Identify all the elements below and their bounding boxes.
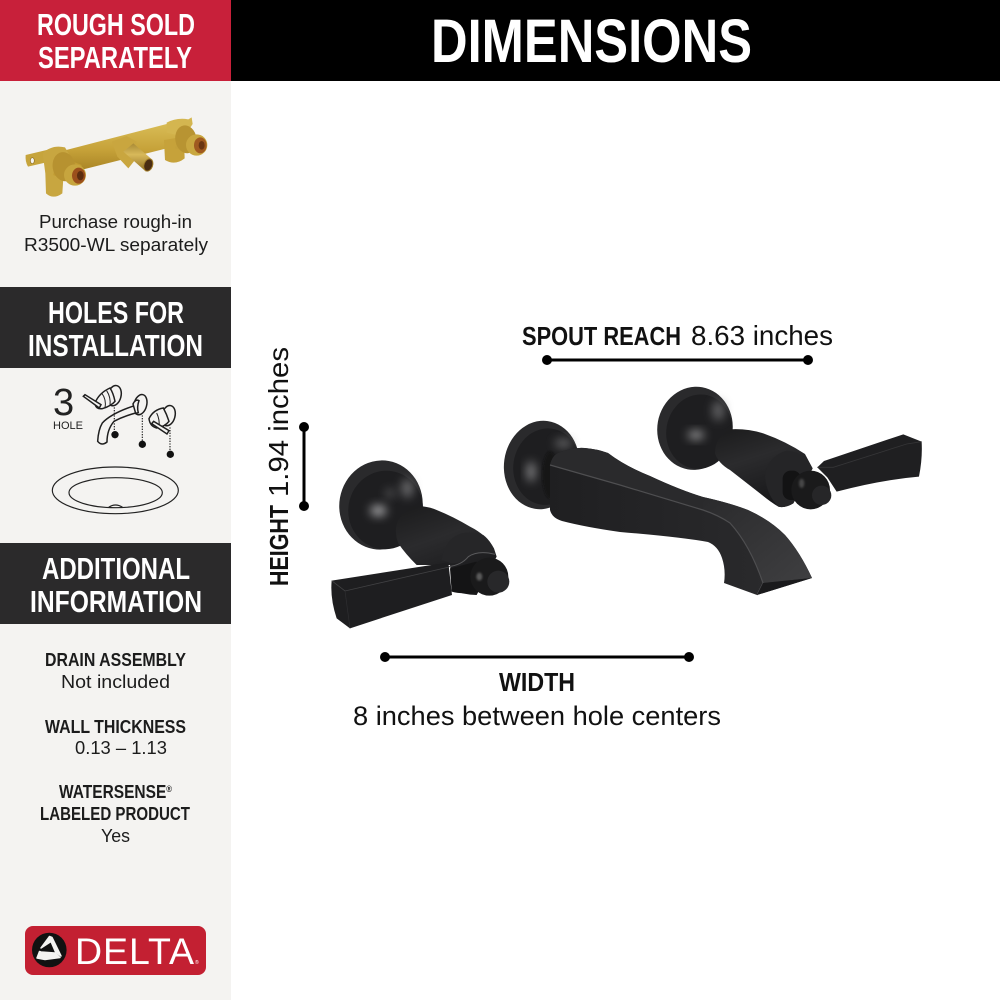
dimension: width: WIDTH — [499, 667, 575, 697]
dimension: width — [353, 652, 721, 731]
faucet: spout — [498, 416, 812, 595]
icon: three hole label: HOLE — [53, 420, 83, 432]
text: purchase rough-in: Purchase rough-in — [39, 211, 192, 232]
heading: additional information: INFORMATION — [30, 584, 202, 619]
spec: watersense: LABELED PRODUCT — [40, 804, 190, 824]
spec: watersense: Yes — [101, 826, 130, 846]
dimension: spout reach — [522, 320, 833, 365]
spec: watersense: ® — [166, 784, 172, 794]
logo: delta: ® — [195, 959, 199, 966]
text: purchase rough-in: R3500-WL separately — [24, 234, 209, 255]
icon: three hole label: 3 — [53, 382, 74, 424]
heading: additional information: ADDITIONAL — [42, 551, 190, 586]
faucet: right handle — [651, 381, 922, 509]
dimension: height: 1.94 inches — [263, 347, 294, 497]
logo: delta — [25, 926, 206, 975]
icon: three hole label — [53, 382, 83, 432]
heading: holes for installation — [0, 287, 231, 368]
dimension: spout reach: SPOUT REACH — [522, 321, 681, 351]
spec: wall thickness: WALL THICKNESS — [45, 717, 186, 737]
banner: rough sold separately: SEPARATELY — [38, 40, 192, 75]
image: brass rough-in valve — [26, 117, 207, 197]
spec: drain assembly — [45, 650, 186, 692]
spec: wall thickness — [45, 717, 186, 758]
faucet: left handle — [331, 454, 509, 628]
spec: watersense: WATERSENSE — [59, 782, 184, 802]
heading: holes for installation: INSTALLATION — [28, 328, 203, 363]
banner: rough sold separately: ROUGH SOLD — [37, 7, 195, 42]
spec: drain assembly: DRAIN ASSEMBLY — [45, 650, 186, 670]
heading: holes for installation: HOLES FOR — [48, 295, 184, 330]
dimension: height — [263, 347, 309, 586]
sidebar background — [0, 0, 231, 1000]
text: purchase rough-in — [24, 211, 209, 255]
logo: delta: DELTA — [75, 930, 194, 972]
icon: three hole faucet — [83, 384, 177, 458]
spec: watersense — [40, 782, 190, 846]
dimension: height: HEIGHT — [264, 505, 294, 586]
spec: wall thickness: 0.13 – 1.13 — [75, 738, 167, 758]
dimension: width: 8 inches between hole centers — [353, 701, 721, 731]
title: dimensions — [231, 0, 1000, 81]
heading: additional information — [0, 543, 231, 624]
spec: drain assembly: Not included — [61, 672, 170, 692]
banner: rough sold separately — [0, 0, 231, 81]
title: dimensions: DIMENSIONS — [431, 7, 752, 75]
dimension: spout reach: 8.63 inches — [691, 320, 833, 351]
icon: basin — [52, 467, 178, 514]
